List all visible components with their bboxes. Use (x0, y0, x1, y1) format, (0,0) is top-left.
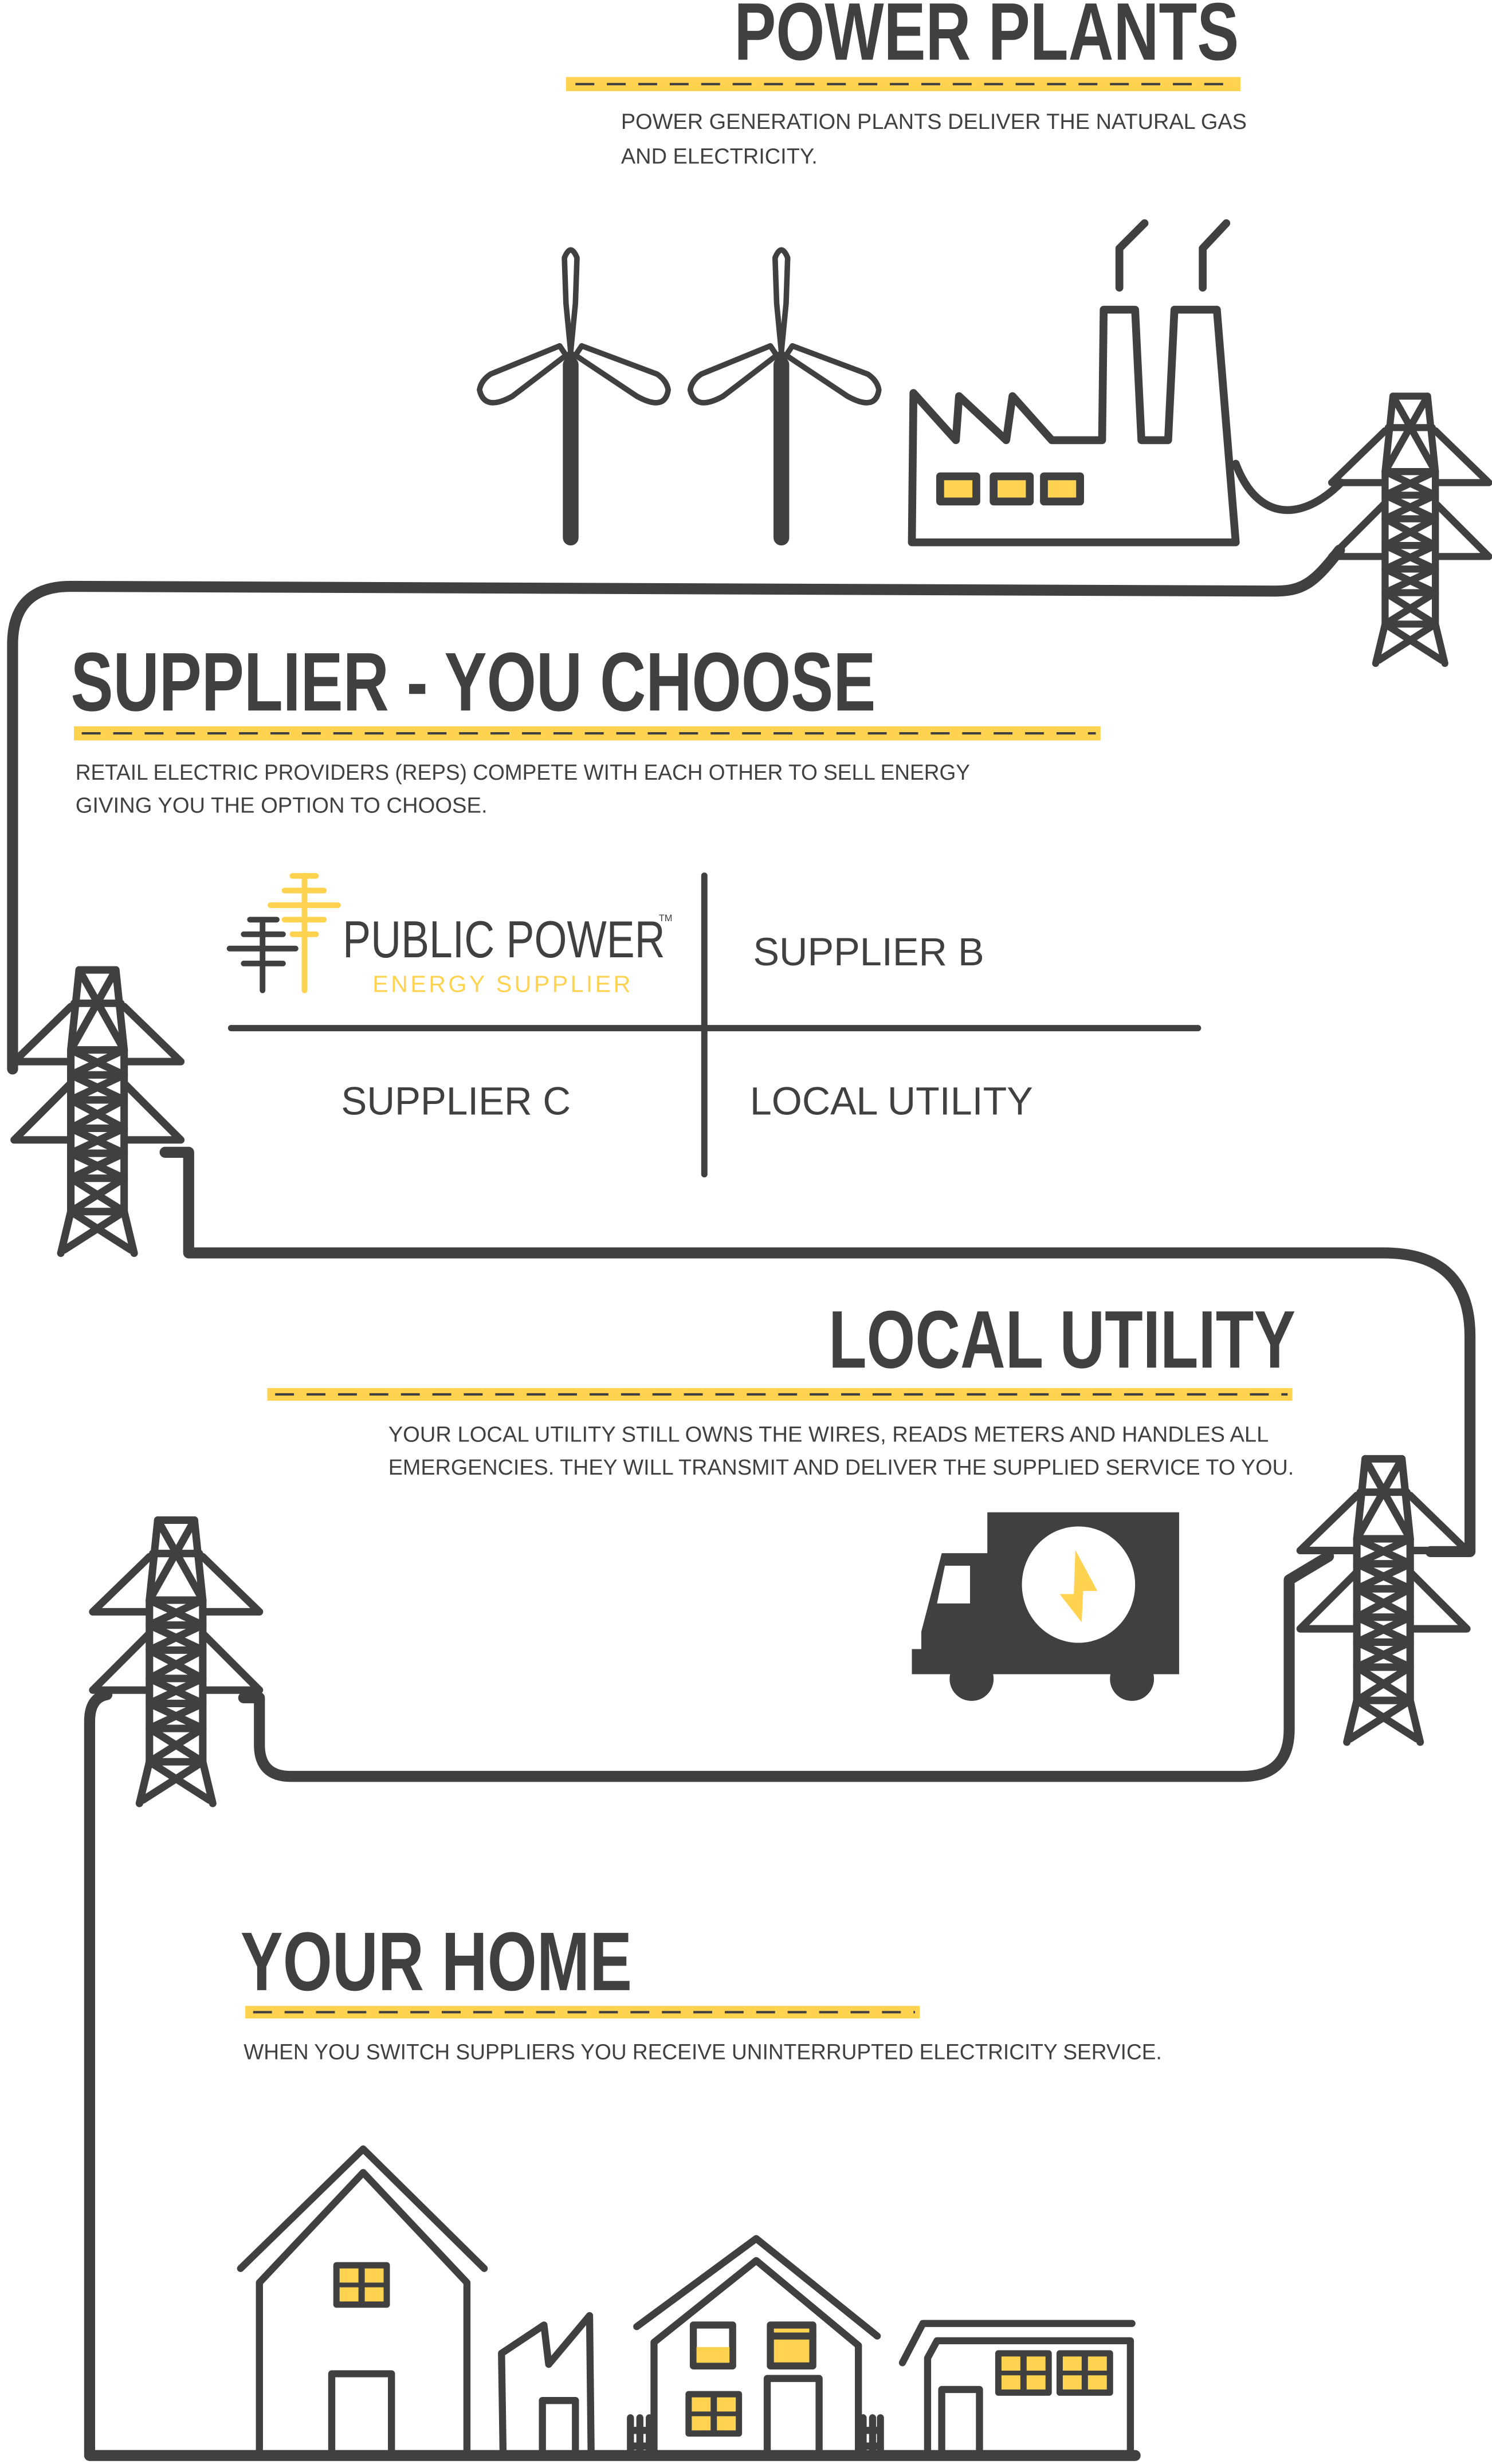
text: supplier description: RETAIL ELECTRIC PROVIDERS (REPS) COMPETE WITH EACH OTHER TO SELL ENERGY (76, 760, 970, 785)
title: your home: YOUR HOME (241, 1915, 632, 2008)
logo: public power (230, 875, 672, 997)
text: power plants description: AND ELECTRICITY. (621, 144, 818, 168)
title: supplier - you choose: SUPPLIER - YOU CHOOSE (70, 635, 875, 728)
title: your home (241, 1915, 920, 2018)
label: local utility: LOCAL UTILITY (750, 1079, 1033, 1123)
logo: public power: PUBLIC POWER (343, 911, 665, 969)
icon: tower right middle (1300, 1459, 1467, 1742)
text: supplier description: GIVING YOU THE OPTION TO CHOOSE. (76, 793, 488, 818)
title: local utility: LOCAL UTILITY (829, 1294, 1295, 1385)
text: power plants description: POWER GENERATION PLANTS DELIVER THE NATURAL GAS (621, 109, 1247, 134)
text: local utility description: EMERGENCIES. THEY WILL TRANSMIT AND DELIVER THE SUPPLIED SERVICE TO YOU. (388, 1455, 1294, 1480)
icon: tower left (14, 970, 181, 1253)
icon: wind turbine 2 (690, 250, 879, 537)
text: local utility description (388, 1422, 1294, 1480)
icon: houses (241, 2149, 1132, 2455)
supplier grid (230, 875, 1198, 1174)
title: power plants (566, 0, 1240, 91)
icon: tower left lower (93, 1520, 260, 1803)
house 2 (630, 2239, 881, 2455)
house 3 (902, 2324, 1132, 2455)
logo: public power: ENERGY SUPPLIER (372, 970, 630, 997)
text: power plants description (621, 109, 1247, 168)
logo: public power: TM (659, 913, 672, 923)
icon: factory (912, 223, 1341, 543)
house 1 (241, 2149, 484, 2455)
text: local utility description: YOUR LOCAL UTILITY STILL OWNS THE WIRES, READS METERS AND HANDLES ALL (388, 1422, 1269, 1447)
title: local utility (267, 1294, 1295, 1401)
text: supplier description (76, 760, 970, 818)
label: supplier b: SUPPLIER B (753, 930, 984, 974)
main power line path (13, 550, 1470, 2455)
text: your home description: WHEN YOU SWITCH SUPPLIERS YOU RECEIVE UNINTERRUPTED ELECTRICITY SERVICE. (244, 2040, 1162, 2065)
label: supplier c: SUPPLIER C (341, 1079, 571, 1123)
icon: wind turbine 1 (480, 250, 668, 537)
small building (501, 2316, 591, 2455)
icon: utility truck (912, 1512, 1179, 1701)
icon: tower top right (1332, 396, 1489, 663)
